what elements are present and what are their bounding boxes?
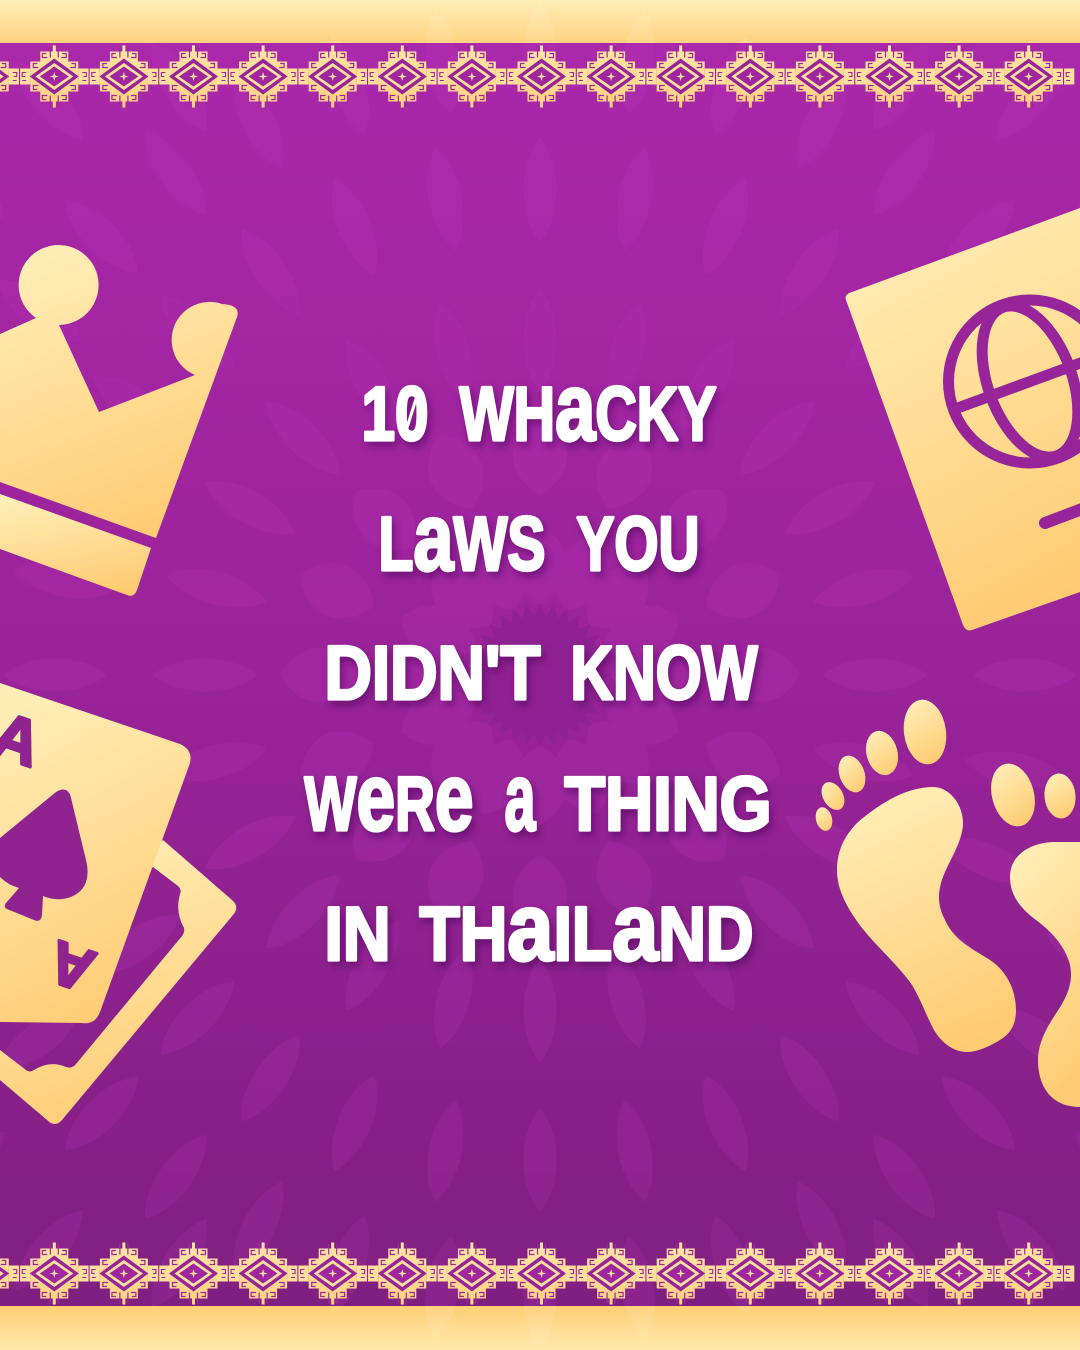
- globe emblem: [948, 293, 1080, 470]
- left foot: [813, 697, 1016, 1052]
- top gold band: [0, 0, 1080, 43]
- title line 5: THaILaND: [420, 874, 754, 981]
- icon: footprints: [813, 697, 1080, 1107]
- title line 3: KNOW: [570, 631, 758, 716]
- title line 4: THING: [564, 762, 772, 847]
- petal highlights on gold bands: [152, 15, 928, 1342]
- rank bottom: A: [40, 928, 103, 1005]
- title line 3: [324, 631, 758, 716]
- central starburst: [457, 592, 623, 758]
- back card: [0, 840, 236, 1124]
- right foot: [984, 759, 1080, 1107]
- top ornamental border: [0, 46, 1074, 108]
- bottom gold band: [0, 1306, 1080, 1350]
- title line 4: [304, 744, 772, 851]
- title line 2: [378, 484, 700, 591]
- icon: crown: [0, 245, 238, 596]
- title line 1: WHaCKY: [460, 354, 716, 461]
- icon: passport: [846, 208, 1080, 630]
- title line 2: LaWS: [378, 484, 546, 591]
- title line 4: a: [504, 744, 536, 851]
- title: [304, 354, 772, 981]
- icon: playing cards: [0, 683, 236, 1124]
- title line 1: [362, 354, 716, 461]
- bottom ornamental border: [0, 1242, 1074, 1304]
- passport line: [1045, 506, 1080, 523]
- title line 2: YOU: [576, 502, 700, 587]
- title line 1: 10: [362, 372, 428, 457]
- title line 5: IN: [324, 892, 390, 977]
- front card: [0, 683, 191, 1023]
- spade: [0, 790, 88, 921]
- title line 3: DIDN'T: [324, 631, 540, 716]
- title line 4: WeRe: [304, 744, 474, 851]
